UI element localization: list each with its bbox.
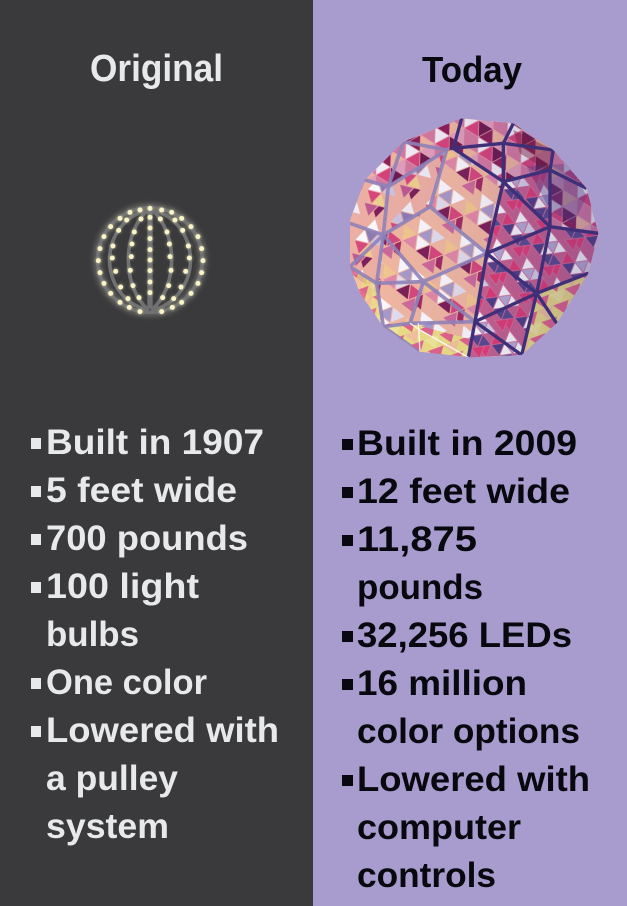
list: today facts: 16 million — [357, 664, 527, 703]
list: today facts: Lowered with — [357, 760, 590, 799]
heading: Today: Today — [422, 49, 522, 90]
icon: today LED crystal ball — [350, 118, 598, 358]
list: original facts: Built in 1907 — [46, 423, 264, 462]
list: today facts: color options — [357, 712, 580, 751]
list: today facts: Built in 2009 — [357, 424, 577, 463]
icon: original light-bulb ball — [96, 206, 205, 314]
list: today facts: computer — [357, 808, 521, 847]
list: original facts: 100 light — [46, 567, 199, 606]
heading: Original: Original — [90, 48, 223, 90]
list: original facts: system — [46, 807, 169, 846]
list: original facts — [31, 423, 279, 846]
list: today facts: controls — [357, 856, 496, 895]
list: today facts: 11,875 — [357, 520, 477, 559]
list: original facts: 700 pounds — [46, 519, 248, 558]
list: original facts: a pulley — [46, 759, 179, 798]
list: original facts: 5 feet wide — [46, 471, 237, 510]
list: today facts: pounds — [357, 568, 483, 607]
panel: today background — [313, 0, 627, 906]
list: today facts: 32,256 LEDs — [357, 616, 572, 655]
list: original facts: bulbs — [46, 615, 139, 654]
list: original facts: Lowered with — [46, 711, 279, 750]
list: original facts: One color — [46, 663, 207, 702]
list: today facts — [342, 424, 590, 895]
list: today facts: 12 feet wide — [357, 472, 570, 511]
panel: original background — [0, 0, 313, 906]
